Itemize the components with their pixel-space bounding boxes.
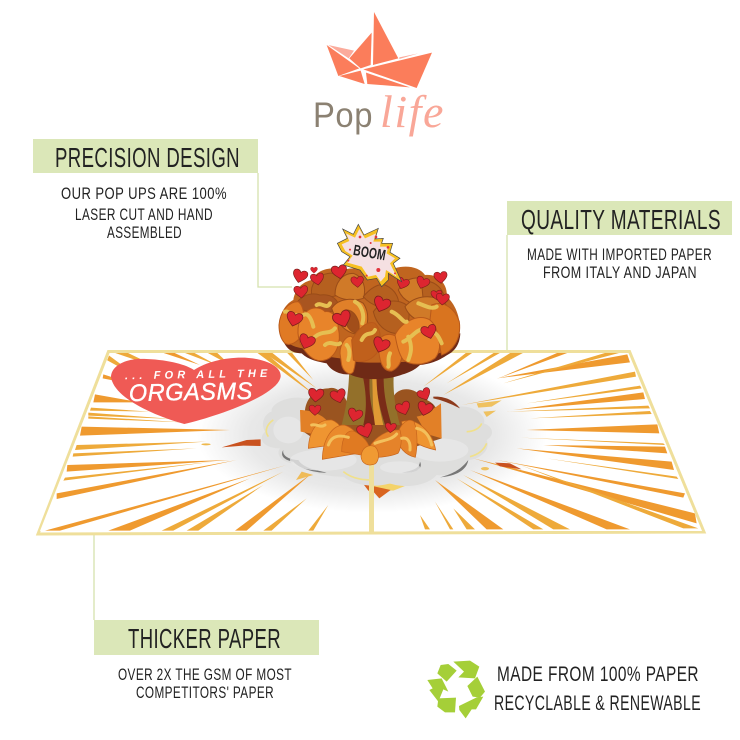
scalloped front petals bbox=[308, 420, 436, 465]
recycling statement bbox=[494, 663, 701, 715]
heading banner bbox=[94, 620, 319, 655]
streak bbox=[222, 439, 261, 447]
wordmark: Pop: Pop bbox=[313, 96, 373, 135]
burst rays bbox=[45, 351, 698, 531]
mushroom cap bbox=[279, 264, 460, 379]
connector lines bbox=[94, 173, 507, 620]
description bbox=[527, 245, 712, 282]
description: ASSEMBLED bbox=[107, 223, 182, 242]
yellow highlights bbox=[285, 302, 442, 367]
heading banner: PRECISION DESIGN bbox=[55, 142, 240, 173]
pop-up card bbox=[38, 224, 704, 534]
description bbox=[61, 184, 227, 242]
front lobes bbox=[279, 302, 460, 374]
wordmark: life: life bbox=[380, 86, 444, 137]
callout: quality materials bbox=[507, 201, 732, 282]
heart with message bbox=[111, 358, 281, 424]
center glow bbox=[40, 353, 702, 531]
heading banner bbox=[33, 139, 258, 173]
middle ring bbox=[295, 294, 448, 334]
cap silhouette bbox=[279, 267, 460, 363]
fold line bbox=[369, 463, 374, 532]
top lobes bbox=[311, 273, 445, 309]
description: LASER CUT AND HAND bbox=[75, 205, 213, 224]
flame under cloud bbox=[296, 472, 410, 498]
logo: Poplife bbox=[313, 12, 444, 137]
callout: precision design bbox=[33, 139, 258, 242]
icon: recycling symbol bbox=[427, 661, 485, 718]
stem bbox=[342, 370, 400, 425]
base hearts bbox=[308, 387, 434, 440]
sign: BOOM bbox=[337, 224, 402, 287]
smoke cloud bbox=[262, 397, 492, 486]
description: COMPETITORS' PAPER bbox=[136, 683, 274, 702]
heart text: ... FOR ALL THE bbox=[125, 368, 268, 382]
right wall bbox=[417, 403, 442, 438]
sign text: BOOM bbox=[352, 242, 387, 264]
callout: thicker paper bbox=[94, 620, 319, 702]
description: OUR POP UPS ARE 100% bbox=[61, 184, 227, 203]
card base bbox=[38, 352, 704, 534]
heading banner: THICKER PAPER bbox=[128, 623, 281, 654]
cap underside bbox=[282, 333, 460, 379]
cap hearts bbox=[285, 264, 450, 355]
description bbox=[118, 665, 292, 702]
icon: origami paper boat bbox=[327, 12, 432, 88]
heart with message: ORGASMS bbox=[129, 378, 253, 407]
mushroom base and stem bbox=[300, 368, 442, 465]
left wall bbox=[300, 410, 328, 435]
back ridge bbox=[303, 388, 442, 447]
description: OVER 2X THE GSM OF MOST bbox=[118, 665, 292, 684]
